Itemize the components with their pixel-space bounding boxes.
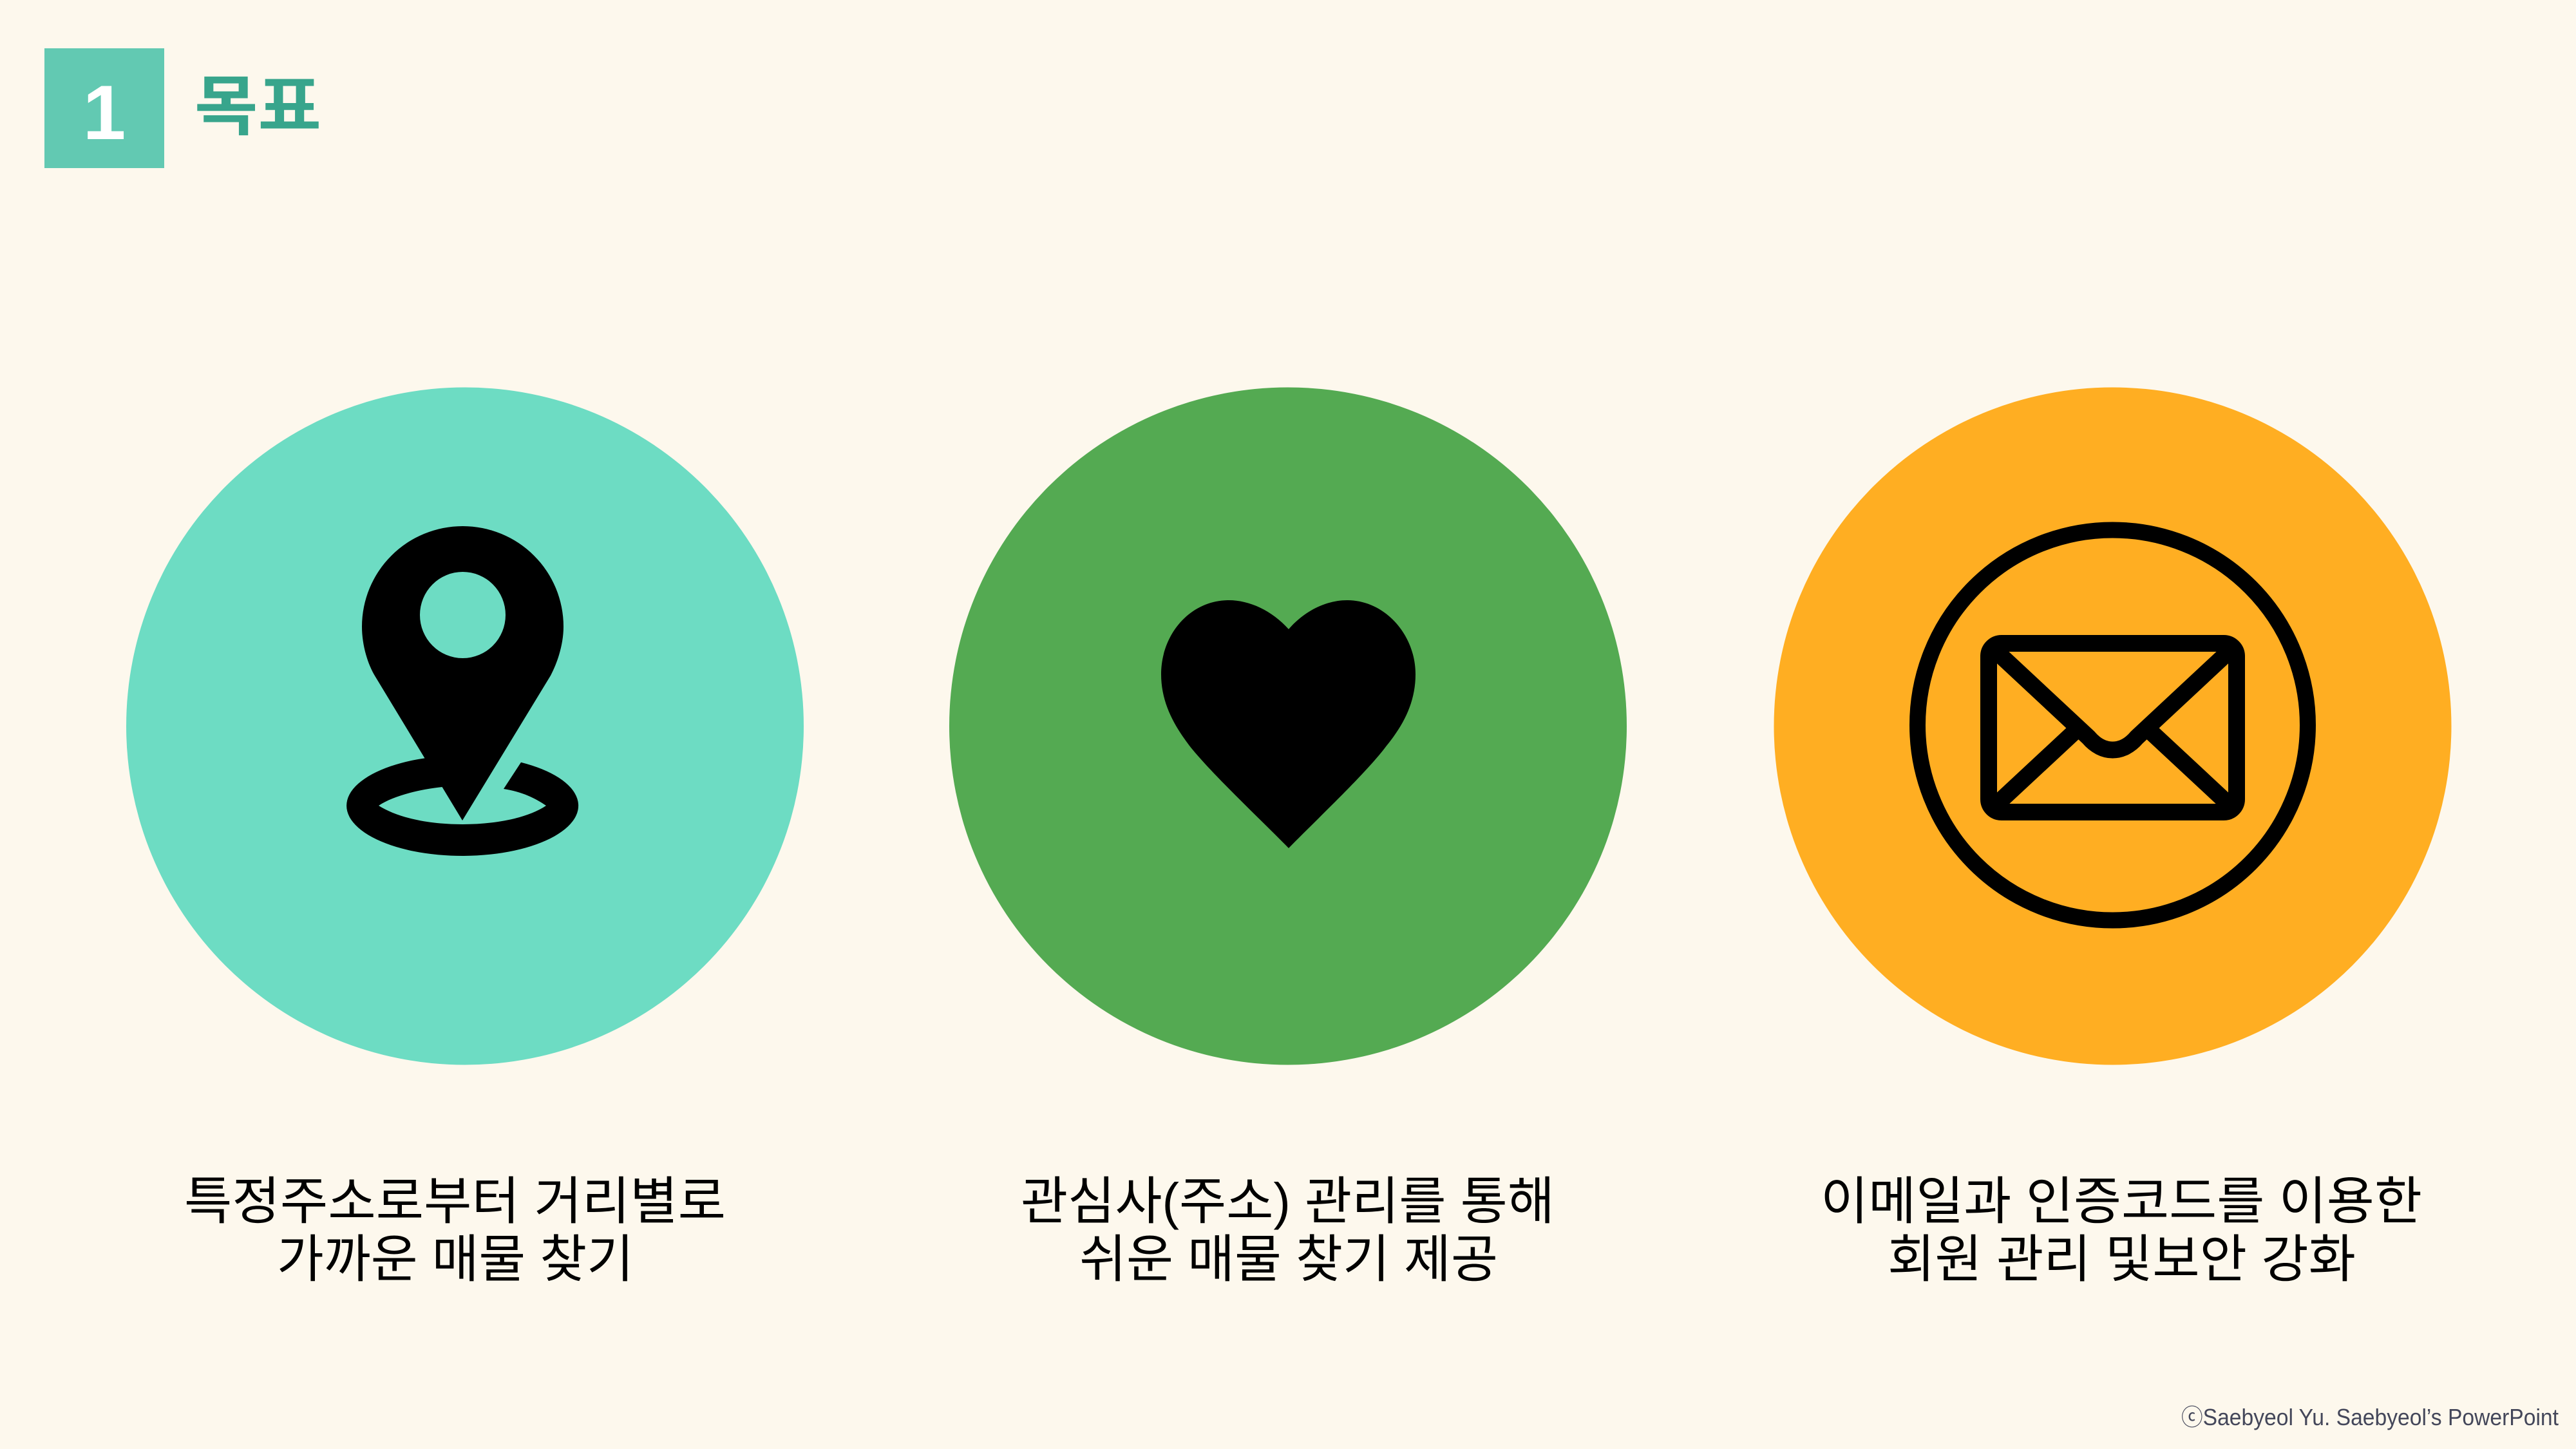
panel: favorites bbox=[949, 388, 1627, 1288]
copyright note: ⓒSaebyeol Yu. Saebyeol’s PowerPoint bbox=[2181, 1404, 2559, 1430]
panel: location bbox=[126, 388, 804, 1288]
caption: favorites: 쉬운 매물 찾기 제공 bbox=[1079, 1231, 1498, 1288]
icon: heart bbox=[1161, 600, 1416, 848]
circle: green bbox=[949, 388, 1627, 1065]
circle: mint bbox=[126, 388, 804, 1065]
caption: location: 특정주소로부터 거리별로 bbox=[184, 1173, 726, 1230]
caption: favorites: 관심사(주소) 관리를 통해 bbox=[1021, 1173, 1555, 1230]
caption: location: 가까운 매물 찾기 bbox=[277, 1231, 634, 1288]
caption: location bbox=[184, 1173, 726, 1288]
caption: email: 회원 관리 및보안 강화 bbox=[1888, 1231, 2356, 1288]
circle: orange bbox=[1774, 388, 2451, 1065]
caption: email bbox=[1821, 1173, 2422, 1288]
caption: email: 이메일과 인증코드를 이용한 bbox=[1821, 1173, 2422, 1230]
section number badge bbox=[44, 48, 164, 168]
section number badge: 1 bbox=[83, 70, 126, 156]
icon: map pin bbox=[346, 526, 578, 856]
panel: email bbox=[1774, 388, 2451, 1288]
icon: envelope in circle bbox=[1918, 530, 2308, 920]
caption: favorites bbox=[1021, 1173, 1555, 1288]
title: 목표 bbox=[194, 70, 321, 144]
